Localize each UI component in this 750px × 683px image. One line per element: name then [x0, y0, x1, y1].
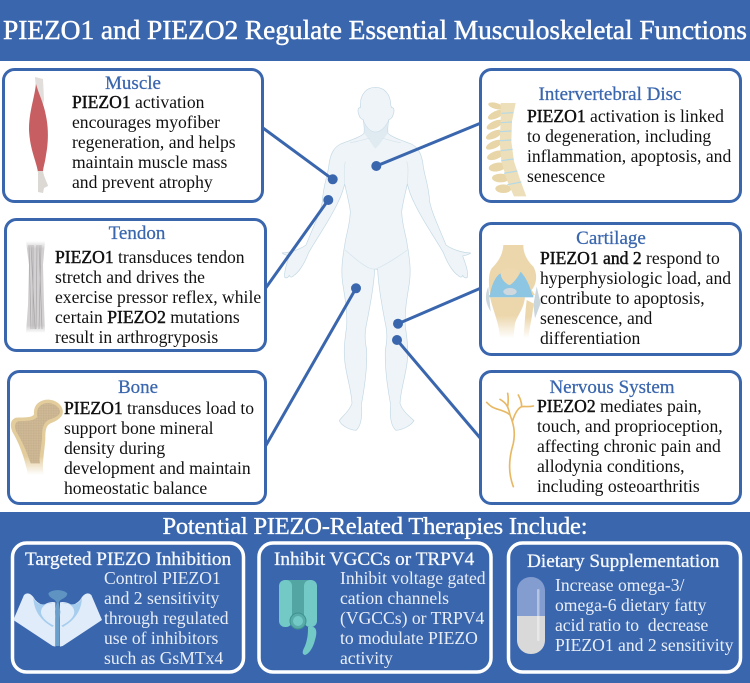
human body figure — [282, 87, 471, 430]
connector line: tendon — [265, 195, 333, 289]
VGCC text: activity — [340, 648, 393, 668]
dietary text: PIEZO1 and 2 sensitivity — [555, 635, 734, 655]
icon: capsule — [517, 577, 545, 654]
intervertebral disc text: inflammation, apoptosis, and — [527, 146, 731, 166]
inhibition text: use of inhibitors — [104, 628, 219, 648]
connector line: bone — [265, 283, 361, 447]
panel: bone — [8, 372, 266, 504]
icon: spine — [485, 101, 526, 196]
inhibition text: through regulated — [104, 608, 229, 628]
panel: intervertebral disc — [480, 70, 740, 202]
tendon text: certain — [55, 307, 107, 327]
title banner: PIEZO1 and PIEZO2 Regulate Essential Musculoskeletal Functions — [3, 14, 747, 45]
panel: targeted PIEZO inhibition: Targeted PIEZO Inhibition — [25, 549, 232, 570]
nervous system text: touch, and proprioception, — [537, 416, 723, 436]
panel: muscle — [4, 70, 262, 202]
VGCC text: cation channels — [340, 588, 449, 608]
panel: nervous system: Nervous System — [549, 377, 675, 398]
panel: dietary supplementation — [508, 543, 740, 672]
tendon text: stretch and drives the — [55, 267, 205, 287]
inhibition text: Control PIEZO1 — [104, 568, 221, 588]
bone text: development and maintain — [64, 458, 251, 478]
muscle text: regeneration, and helps — [72, 132, 236, 152]
icon: nerve — [487, 393, 533, 487]
panel: muscle: Muscle — [105, 73, 161, 94]
cartilage text: differentiation — [540, 328, 641, 348]
panel: tendon — [6, 220, 266, 350]
panel: targeted PIEZO inhibition — [12, 543, 244, 672]
panel: inhibit VGCCs or TRPV4 — [259, 543, 491, 672]
VGCC text: (VGCCs) or TRPV4 — [340, 608, 485, 628]
panel: bone: Bone — [118, 377, 158, 398]
tendon text: PIEZO2 mutations — [107, 307, 240, 327]
connector line: intervertebral disc — [371, 123, 481, 171]
dietary text: acid ratio to decrease — [555, 615, 709, 635]
muscle text: encourages myofiber — [72, 112, 220, 132]
connector line: muscle — [263, 128, 338, 184]
bone text: support bone mineral — [64, 418, 214, 438]
tendon text: exercise pressor reflex, while — [55, 287, 261, 307]
muscle text: and prevent atrophy — [72, 172, 213, 192]
cartilage text: contribute to apoptosis, — [540, 288, 705, 308]
icon: muscle — [29, 77, 48, 193]
intervertebral disc text: senescence — [527, 166, 605, 186]
icon: knee — [486, 245, 541, 338]
bone text: density during — [64, 438, 165, 458]
connector line: cartilage — [393, 288, 481, 329]
panel: cartilage — [480, 224, 740, 354]
dietary text: Increase omega-3/ — [555, 575, 685, 595]
panel: tendon: Tendon — [109, 223, 166, 244]
nervous system text: allodynia conditions, — [537, 456, 685, 476]
icon: PIEZO channel — [13, 590, 102, 647]
intervertebral disc text: to degeneration, including — [527, 126, 711, 146]
intervertebral disc text: PIEZO1 activation is linked — [527, 106, 724, 126]
bone text: homeostatic balance — [64, 478, 207, 498]
muscle text: maintain muscle mass — [72, 152, 228, 172]
icon: ion channel — [279, 580, 317, 655]
therapies heading: Potential PIEZO-Related Therapies Include: — [162, 513, 588, 540]
icon: tendon — [26, 241, 45, 333]
inhibition text: such as GsMTx4 — [104, 648, 223, 668]
title banner — [0, 0, 750, 61]
inhibition text: and 2 sensitivity — [104, 588, 220, 608]
dietary text: omega-6 dietary fatty — [555, 595, 707, 615]
panel: cartilage: Cartilage — [576, 228, 646, 249]
panel: dietary supplementation: Dietary Supplementation — [527, 551, 720, 572]
tendon text: result in arthrogryposis — [55, 327, 218, 347]
icon: bone — [11, 400, 63, 475]
VGCC text: Inhibit voltage gated — [340, 568, 486, 588]
nervous system text: PIEZO2 mediates pain, — [537, 396, 702, 416]
nervous system text: affecting chronic pain and — [537, 436, 721, 456]
panel: nervous system — [480, 372, 740, 504]
cartilage text: hyperphysiologic load, and — [540, 268, 731, 288]
cartilage text: senescence, and — [540, 308, 653, 328]
connector line: nervous system — [392, 335, 481, 439]
panel: intervertebral disc: Intervertebral Disc — [539, 84, 681, 105]
cartilage text: PIEZO1 and 2 respond to — [540, 248, 720, 268]
panel: inhibit VGCCs or TRPV4: Inhibit VGCCs or TRPV4 — [274, 549, 475, 570]
VGCC text: to modulate PIEZO — [340, 628, 478, 648]
bone text: PIEZO1 transduces load to — [64, 398, 254, 418]
nervous system text: including osteoarthritis — [537, 476, 700, 496]
muscle text: PIEZO1 activation — [72, 92, 204, 112]
therapies section background — [0, 512, 750, 683]
tendon text: PIEZO1 transduces tendon — [55, 247, 245, 267]
